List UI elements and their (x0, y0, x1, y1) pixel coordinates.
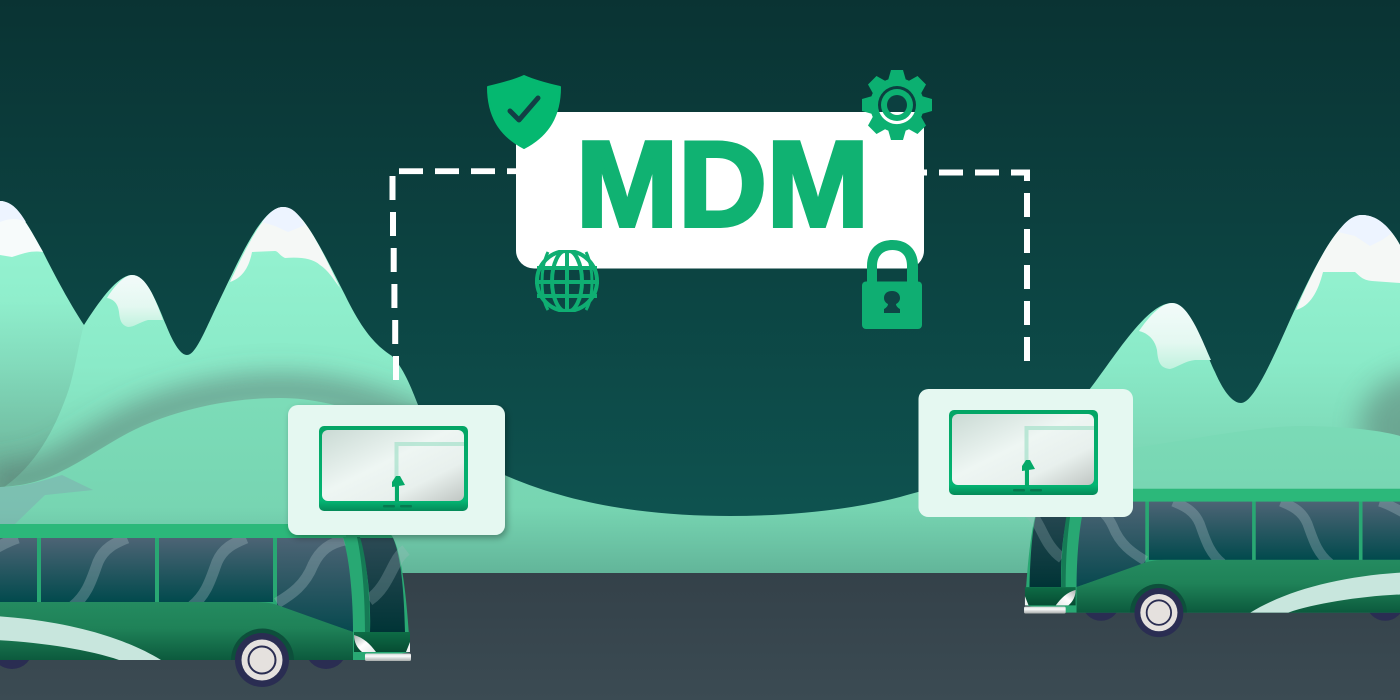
dashed connector right (922, 170, 1030, 361)
device card right (918, 389, 1133, 517)
hills (0, 398, 1400, 580)
icon: gear (862, 70, 932, 140)
mountains left (0, 201, 440, 500)
dashed connector left (390, 168, 519, 380)
icon: globe (535, 250, 599, 312)
icon: tablet right (949, 410, 1098, 495)
mountains right (1090, 215, 1400, 448)
icon: padlock (862, 240, 922, 329)
snow caps left (0, 201, 340, 327)
icon: shield (488, 76, 560, 148)
bus right (1024, 489, 1400, 637)
device card left (288, 405, 505, 535)
MDM card (516, 112, 924, 268)
snow caps right (1139, 215, 1400, 369)
icon: tablet left (319, 426, 468, 511)
road (0, 573, 1400, 700)
title: MDM (576, 116, 869, 252)
bus left (0, 524, 411, 687)
